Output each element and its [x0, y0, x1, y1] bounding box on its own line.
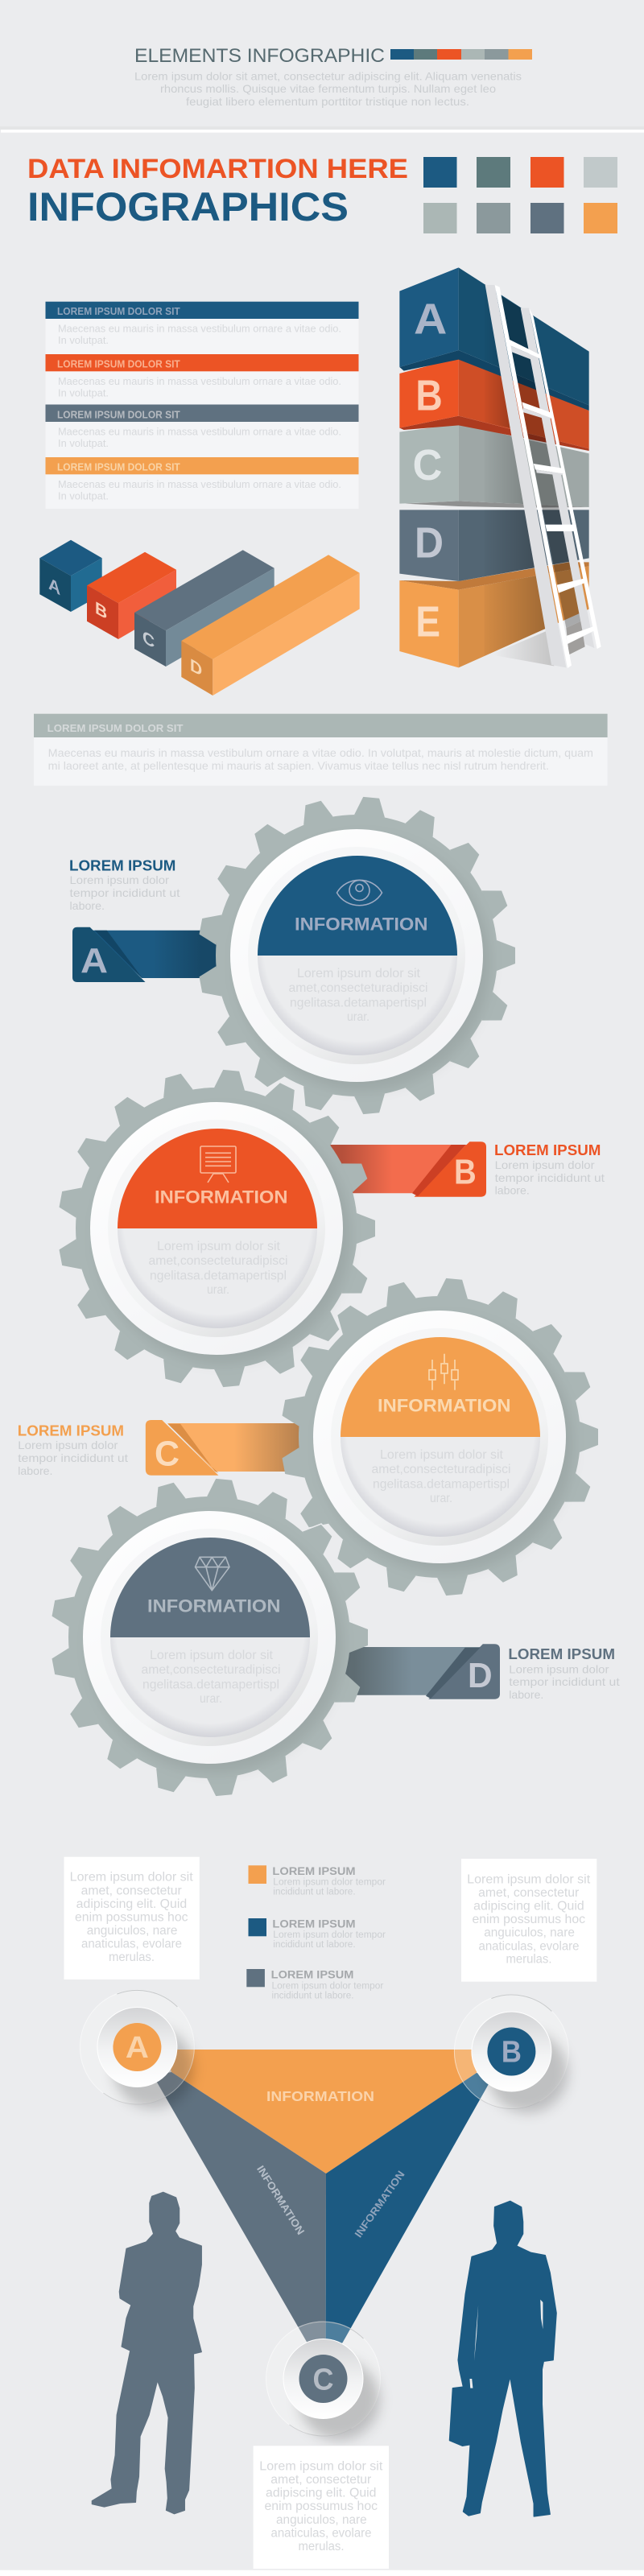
block c: C [142, 626, 155, 652]
silhouette: person left [93, 2192, 201, 2514]
block e [399, 562, 589, 667]
blue segment: INFORMATION [352, 2169, 407, 2240]
text box two: enim possumus hoc [472, 1913, 585, 1926]
legend item orange [248, 1865, 386, 1897]
gear body text: Lorem ipsum dolor sit [380, 1448, 504, 1462]
label a [69, 858, 180, 912]
wide text panel [34, 714, 608, 786]
icon: presentation board [200, 1146, 236, 1183]
gear body text [148, 1240, 288, 1297]
list item two: In volutpat. [58, 387, 109, 399]
text box three: Lorem ipsum dolor sit [259, 2459, 383, 2473]
list item one: In volutpat. [58, 334, 109, 346]
gear body text: ngelitasa.detamapertispl [373, 1478, 510, 1492]
slate segment: INFORMATION [254, 2163, 307, 2237]
label b: Lorem ipsum dolor [495, 1158, 595, 1171]
text box three [254, 2446, 389, 2569]
text box one [64, 1857, 200, 1979]
label b: tempor incididunt ut [495, 1171, 605, 1184]
badge b [454, 1995, 568, 2112]
text box one: Lorem ipsum dolor sit [70, 1871, 193, 1885]
ribbon d [306, 1644, 500, 1699]
text box one: anguiculos, nare [87, 1924, 177, 1938]
list item two: LOREM IPSUM DOLOR SIT [57, 358, 180, 370]
text box three: anguiculos, nare [276, 2513, 367, 2527]
text box two: anaticulas, evolare [478, 1939, 580, 1953]
list item four: Maecenas eu mauris in massa vestibulum ornare a vitae odio. [58, 478, 341, 490]
icon: eye [336, 880, 382, 906]
text box one: anaticulas, evolare [81, 1938, 182, 1951]
gear body text: Lorem ipsum dolor sit [297, 967, 421, 980]
gear b body [58, 1069, 375, 1388]
text box one: merulas. [109, 1951, 155, 1964]
block a [399, 267, 589, 411]
list item one: Maecenas eu mauris in massa vestibulum ornare a vitae odio. [58, 323, 341, 335]
list item four: In volutpat. [58, 490, 109, 502]
text box three: merulas. [298, 2540, 345, 2553]
orange segment: INFORMATION [266, 2088, 374, 2104]
gear body text: Lorem ipsum dolor sit [150, 1649, 274, 1662]
intro paragraph [134, 69, 522, 108]
label d [508, 1646, 620, 1701]
gear body text: urar. [207, 1283, 229, 1297]
label a: tempor incididunt ut [69, 886, 180, 899]
intro paragraph: feugiat libero elementum porttitor tristique non lectus. [186, 95, 469, 108]
label b: LOREM IPSUM [494, 1142, 601, 1158]
gear body text: urar. [347, 1010, 369, 1024]
ribbon c [146, 1420, 322, 1476]
list item two: Maecenas eu mauris in massa vestibulum ornare a vitae odio. [58, 375, 341, 387]
triangle diagram [153, 2050, 493, 2359]
label c: Lorem ipsum dolor [18, 1439, 118, 1451]
gear body text: ngelitasa.detamapertispl [150, 1269, 287, 1283]
block c: C [413, 442, 442, 489]
legend item orange: Lorem ipsum dolor tempor [273, 1878, 386, 1888]
label a: LOREM IPSUM [69, 858, 175, 874]
heading line two: INFOGRAPHICS [27, 184, 349, 229]
list item two [45, 354, 359, 399]
gear body text: amet,consecteturadipisci [288, 981, 428, 995]
block b: B [415, 372, 443, 419]
label c [18, 1422, 128, 1477]
colour strip [390, 49, 532, 60]
gear body text: amet,consecteturadipisci [148, 1254, 288, 1268]
text box one: amet, consectetur [81, 1884, 182, 1897]
block d: D [190, 654, 202, 680]
wide text panel: Maecenas eu mauris in massa vestibulum ornare a vitae odio. In volutpat, mauris at molestie dictum, quam [48, 746, 593, 759]
list item four: LOREM IPSUM DOLOR SIT [57, 461, 180, 473]
label c: tempor incididunt ut [18, 1451, 128, 1464]
text box two: amet, consectetur [478, 1886, 579, 1900]
block a [39, 540, 102, 612]
label a: Lorem ipsum dolor [69, 873, 169, 886]
label d: Lorem ipsum dolor [509, 1662, 609, 1675]
label a: labore. [69, 899, 105, 912]
legend item slate: LOREM IPSUM [271, 1969, 353, 1981]
ribbon b [322, 1141, 486, 1197]
legend item orange: LOREM IPSUM [272, 1865, 356, 1877]
gear body text [142, 1649, 280, 1706]
text box two: adipiscing elit. Quid [473, 1900, 584, 1913]
block c [134, 550, 275, 667]
ladder [485, 285, 601, 668]
gear c group [18, 1278, 598, 1596]
stacked blocks with ladder [399, 267, 601, 668]
text box two [461, 1859, 597, 1982]
block b [87, 552, 176, 639]
main heading [27, 154, 408, 229]
block d [181, 555, 360, 696]
badge c: C [312, 2363, 333, 2396]
gear body text: Lorem ipsum dolor sit [157, 1240, 281, 1253]
legend item blue: incididunt ut labore. [273, 1940, 356, 1950]
gear title: INFORMATION [155, 1187, 288, 1208]
ribbon a: A [80, 941, 108, 980]
legend item blue [248, 1918, 386, 1950]
text box three: adipiscing elit. Quid [266, 2487, 377, 2500]
gear b group [58, 1069, 605, 1388]
ribbon a [72, 927, 233, 982]
list item one: LOREM IPSUM DOLOR SIT [57, 305, 180, 317]
badge c [266, 2322, 380, 2440]
wide text panel: LOREM IPSUM DOLOR SIT [47, 722, 184, 734]
icon: candlesticks [429, 1354, 458, 1390]
title: ELEMENTS INFOGRAPHIC [134, 45, 385, 67]
heading line one: DATA INFOMARTION HERE [27, 154, 408, 184]
header: elements infographic [134, 45, 532, 108]
wide text panel: mi laoreet ante, at pellentesque mi mauris at sapien. Vivamus vitae tellus nec nisl rutrum hendrerit. [48, 759, 549, 772]
text box one: adipiscing elit. Quid [76, 1897, 187, 1911]
silhouette: person right with bag [450, 2201, 556, 2516]
legend item slate: incididunt ut labore. [272, 1991, 354, 2000]
badge a [80, 1990, 194, 2108]
gear body text: amet,consecteturadipisci [372, 1463, 510, 1476]
block e: E [415, 599, 440, 646]
label b [494, 1142, 605, 1196]
legend item orange: incididunt ut labore. [273, 1888, 356, 1897]
legend item blue: Lorem ipsum dolor tempor [273, 1930, 386, 1940]
label d: LOREM IPSUM [508, 1646, 615, 1662]
intro paragraph: rhoncus mollis. Quisque vitae fermentum turpis. Nullam eget leo [160, 82, 496, 95]
label d: labore. [509, 1688, 543, 1701]
orange segment [165, 2050, 483, 2174]
gear title: INFORMATION [147, 1596, 280, 1616]
legend [246, 1865, 386, 2000]
gear body text [372, 1448, 510, 1505]
text box two: anguiculos, nare [484, 1926, 575, 1940]
slate segment [153, 2072, 326, 2359]
gear a group [69, 796, 515, 1115]
icon: diamond [195, 1557, 229, 1591]
block d: D [415, 519, 444, 567]
list item three: Maecenas eu mauris in massa vestibulum ornare a vitae odio. [58, 426, 341, 438]
gear title: INFORMATION [295, 914, 428, 934]
list item three: In volutpat. [58, 437, 109, 449]
gear body text: amet,consecteturadipisci [142, 1663, 280, 1677]
list item three: LOREM IPSUM DOLOR SIT [57, 408, 180, 420]
legend item slate [246, 1969, 383, 2000]
list item four [45, 457, 359, 502]
gear a body [198, 796, 515, 1115]
ground shadow [491, 630, 554, 666]
badge a: A [126, 2031, 149, 2065]
label d: tempor incididunt ut [509, 1675, 620, 1688]
block d [399, 510, 589, 581]
text box two: merulas. [506, 1953, 552, 1967]
ribbon c: C [155, 1435, 180, 1474]
label b: labore. [495, 1183, 530, 1196]
block b [399, 357, 589, 451]
list item three [45, 404, 359, 449]
block c [399, 424, 589, 508]
gear body text: urar. [200, 1692, 222, 1706]
block a: A [414, 296, 447, 344]
text box three: amet, consectetur [270, 2473, 371, 2487]
gear body text: urar. [430, 1492, 452, 1505]
block a: A [48, 573, 60, 599]
list item one [45, 302, 359, 346]
gear body text [288, 967, 428, 1024]
ribbon d: D [468, 1656, 493, 1695]
gear body text: ngelitasa.detamapertispl [290, 997, 427, 1010]
legend item slate: Lorem ipsum dolor tempor [272, 1981, 383, 1991]
text box two: Lorem ipsum dolor sit [467, 1872, 591, 1886]
label c: LOREM IPSUM [18, 1422, 124, 1439]
text box three: anaticulas, evolare [270, 2527, 372, 2541]
badge b: B [502, 2035, 522, 2069]
text box one: enim possumus hoc [75, 1910, 188, 1924]
intro paragraph: Lorem ipsum dolor sit amet, consectetur adipiscing elit. Aliquam venenatis [134, 69, 522, 82]
list panel [45, 302, 359, 509]
gear c body [281, 1278, 598, 1596]
blue segment [326, 2073, 493, 2359]
gear body text: ngelitasa.detamapertispl [142, 1678, 279, 1692]
colour swatches [423, 157, 617, 233]
block b: B [95, 597, 107, 623]
isometric bar chart [39, 540, 360, 696]
label c: labore. [18, 1464, 52, 1477]
gear title: INFORMATION [378, 1396, 510, 1415]
gear d body [51, 1478, 368, 1797]
gear d group [51, 1478, 620, 1797]
ribbon b: B [454, 1153, 477, 1192]
text box three: enim possumus hoc [264, 2500, 378, 2513]
legend item blue: LOREM IPSUM [272, 1918, 356, 1930]
